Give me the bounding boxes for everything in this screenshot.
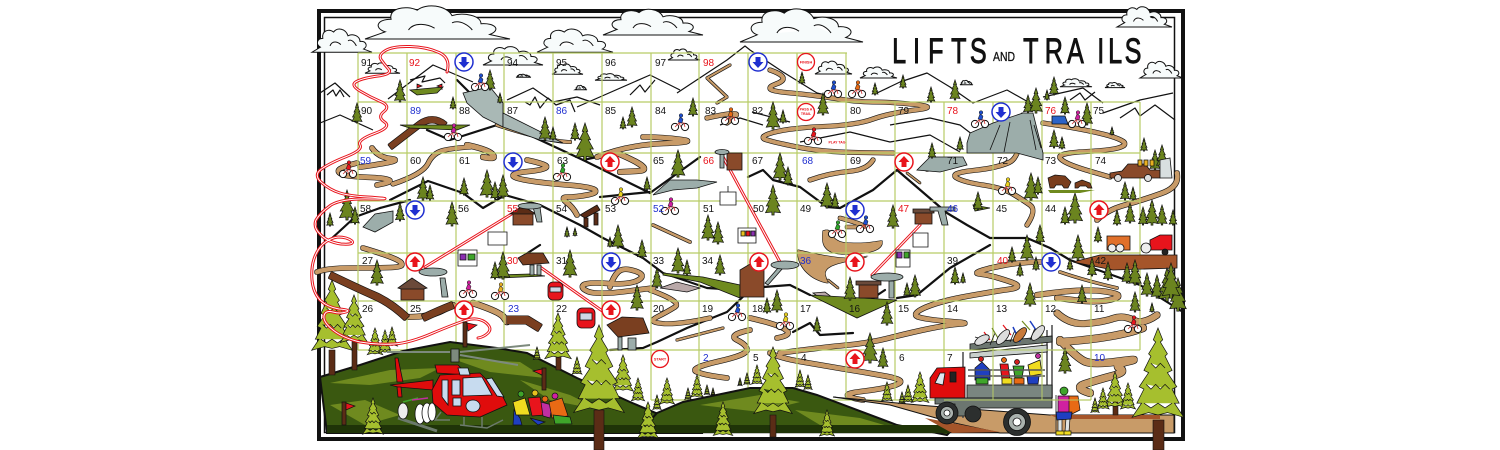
clouds <box>312 6 1183 90</box>
black square numbers: 95 <box>556 58 568 69</box>
black square numbers: 73 <box>1045 156 1057 167</box>
black square numbers: 67 <box>752 156 764 167</box>
black square numbers: 12 <box>1045 304 1057 315</box>
black square numbers: 49 <box>800 204 812 215</box>
black square numbers: 22 <box>556 304 568 315</box>
black square numbers: 63 <box>557 156 569 167</box>
blue square numbers: 89 <box>410 106 422 117</box>
bike shuttle truck <box>930 321 1052 436</box>
black square numbers: 53 <box>605 204 617 215</box>
black square numbers: 15 <box>898 304 910 315</box>
black square numbers: 13 <box>996 304 1008 315</box>
black square numbers: 97 <box>655 58 667 69</box>
red square numbers: 98 <box>703 58 715 69</box>
red action circles: PLAY TAG <box>828 140 846 144</box>
black square numbers: 84 <box>655 106 667 117</box>
black square numbers: 94 <box>507 58 519 69</box>
red action circles: START <box>654 358 667 362</box>
red ribbon trail <box>312 46 490 344</box>
black square numbers: 96 <box>605 58 617 69</box>
helicopter <box>387 345 530 431</box>
title <box>892 32 1141 71</box>
black square numbers: 56 <box>458 204 470 215</box>
red square numbers: 92 <box>409 58 421 69</box>
blue down arrows <box>406 53 1060 271</box>
red action circles: FINISH <box>800 60 812 64</box>
blue square numbers: 52 <box>653 204 665 215</box>
black square numbers: 74 <box>1095 156 1107 167</box>
bears <box>1048 175 1095 193</box>
red action circles: TRAIL <box>801 112 812 116</box>
black square numbers: 90 <box>361 106 373 117</box>
title: AND <box>993 49 1015 64</box>
parked vehicles <box>1052 116 1172 255</box>
black square numbers: 14 <box>947 304 959 315</box>
black square numbers: 72 <box>997 156 1009 167</box>
black square numbers: 39 <box>947 256 959 267</box>
black square numbers: 75 <box>1093 106 1105 117</box>
black square numbers: 79 <box>898 106 910 117</box>
black square numbers: 26 <box>362 304 374 315</box>
black square numbers: 6 <box>899 353 905 364</box>
distant mountain ridges <box>320 46 1175 152</box>
black square numbers: 82 <box>752 106 764 117</box>
red square numbers: 76 <box>1045 106 1057 117</box>
black square numbers: 45 <box>996 204 1008 215</box>
red square numbers: 47 <box>898 204 910 215</box>
red square numbers: 55 <box>507 204 519 215</box>
black square numbers: 80 <box>850 106 862 117</box>
black square numbers: 27 <box>362 256 374 267</box>
black square numbers: 11 <box>1094 304 1105 315</box>
title: LIFTS <box>892 32 987 71</box>
black square numbers: 20 <box>653 304 665 315</box>
blue square numbers: 23 <box>508 304 520 315</box>
rocks and green patches <box>363 87 1177 318</box>
red square numbers <box>409 58 1057 267</box>
main black ridge lines <box>330 80 1183 350</box>
black square numbers: 18 <box>752 304 764 315</box>
blue square numbers: 86 <box>556 106 568 117</box>
red square numbers: 78 <box>947 106 959 117</box>
bright green pine trees <box>312 280 1184 450</box>
bridges <box>330 120 540 328</box>
black square numbers <box>360 58 1107 364</box>
black square numbers: 60 <box>410 156 422 167</box>
black square numbers: 51 <box>703 204 715 215</box>
trails <box>317 65 1177 400</box>
black square numbers: 83 <box>705 106 717 117</box>
blue square numbers: 10 <box>1094 353 1106 364</box>
black square numbers: 42 <box>1095 256 1107 267</box>
black square numbers: 54 <box>556 204 568 215</box>
black square numbers: 33 <box>653 256 665 267</box>
red action circles <box>652 54 846 368</box>
group of riders <box>513 390 572 425</box>
black square numbers: 50 <box>753 204 765 215</box>
blue square numbers: 46 <box>947 204 959 215</box>
lift stations and cabins <box>398 150 955 350</box>
map frame <box>319 11 1183 439</box>
black square numbers: 71 <box>947 156 959 167</box>
lift cables <box>425 155 920 315</box>
black square numbers: 16 <box>849 304 861 315</box>
black square numbers: 58 <box>360 204 372 215</box>
foreground hills and road <box>320 342 1174 435</box>
blue square numbers: 59 <box>360 156 372 167</box>
grid <box>358 53 1140 400</box>
red up arrows <box>406 153 1108 368</box>
black square numbers: 31 <box>556 256 568 267</box>
riders on bikes <box>339 74 1142 333</box>
chairlifts and gondolas <box>458 186 928 328</box>
black square numbers: 17 <box>800 304 812 315</box>
flags <box>342 84 546 425</box>
black square numbers: 85 <box>605 106 617 117</box>
blue square numbers <box>360 106 1106 364</box>
black square numbers: 25 <box>410 304 422 315</box>
blue square numbers: 68 <box>802 156 814 167</box>
black square numbers: 44 <box>1045 204 1057 215</box>
black square numbers: 69 <box>850 156 862 167</box>
black square numbers: 34 <box>702 256 714 267</box>
blue square numbers: 2 <box>703 353 709 364</box>
black square numbers: 61 <box>459 156 471 167</box>
hiker with backpack <box>1056 387 1080 435</box>
black square numbers: 5 <box>753 353 759 364</box>
title: TRAILS <box>1023 32 1141 71</box>
red action circles: PASS A <box>800 108 813 112</box>
blue square numbers: 36 <box>800 256 812 267</box>
black square numbers: 88 <box>459 106 471 117</box>
black square numbers: 91 <box>361 58 373 69</box>
red square numbers: 30 <box>507 256 519 267</box>
black square numbers: 19 <box>702 304 714 315</box>
grid overlay over truck <box>944 350 1140 400</box>
red square numbers: 66 <box>703 156 715 167</box>
black square numbers: 87 <box>507 106 519 117</box>
black square numbers: 4 <box>801 353 807 364</box>
black square numbers: 7 <box>947 353 953 364</box>
black square numbers: 65 <box>653 156 665 167</box>
olive pine trees <box>327 70 1186 373</box>
red square numbers: 40 <box>997 256 1009 267</box>
